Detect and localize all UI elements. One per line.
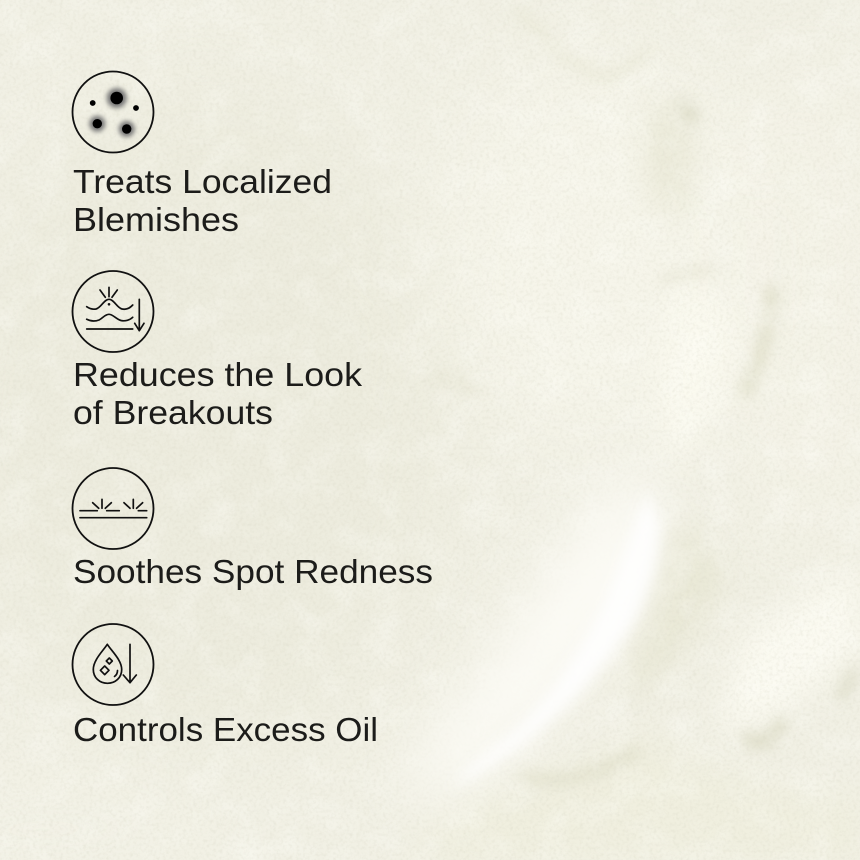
benefit: reduces the look of breakouts bbox=[72, 271, 363, 431]
label: treats localized blemishes bbox=[73, 163, 332, 238]
benefit: controls excess oil bbox=[72, 624, 378, 748]
label: controls excess oil: Controls Excess Oil bbox=[73, 711, 378, 748]
benefit: treats localized blemishes bbox=[72, 72, 332, 238]
icon: skin surface with redness rays bbox=[72, 468, 154, 549]
label: soothes spot redness: Soothes Spot Redness bbox=[73, 553, 433, 590]
label: reduces the look of breakouts: of Breakouts bbox=[73, 394, 273, 431]
benefit: soothes spot redness bbox=[72, 468, 433, 590]
icon: blemish spots bbox=[72, 72, 154, 152]
label: reduces the look of breakouts: Reduces the Look bbox=[73, 356, 363, 393]
label: treats localized blemishes: Blemishes bbox=[73, 201, 239, 238]
label: treats localized blemishes: Treats Localized bbox=[73, 163, 332, 200]
icon: skin bump with down arrow bbox=[72, 271, 154, 352]
icon: oil drop with down arrow bbox=[72, 624, 154, 705]
label: reduces the look of breakouts bbox=[73, 356, 363, 431]
